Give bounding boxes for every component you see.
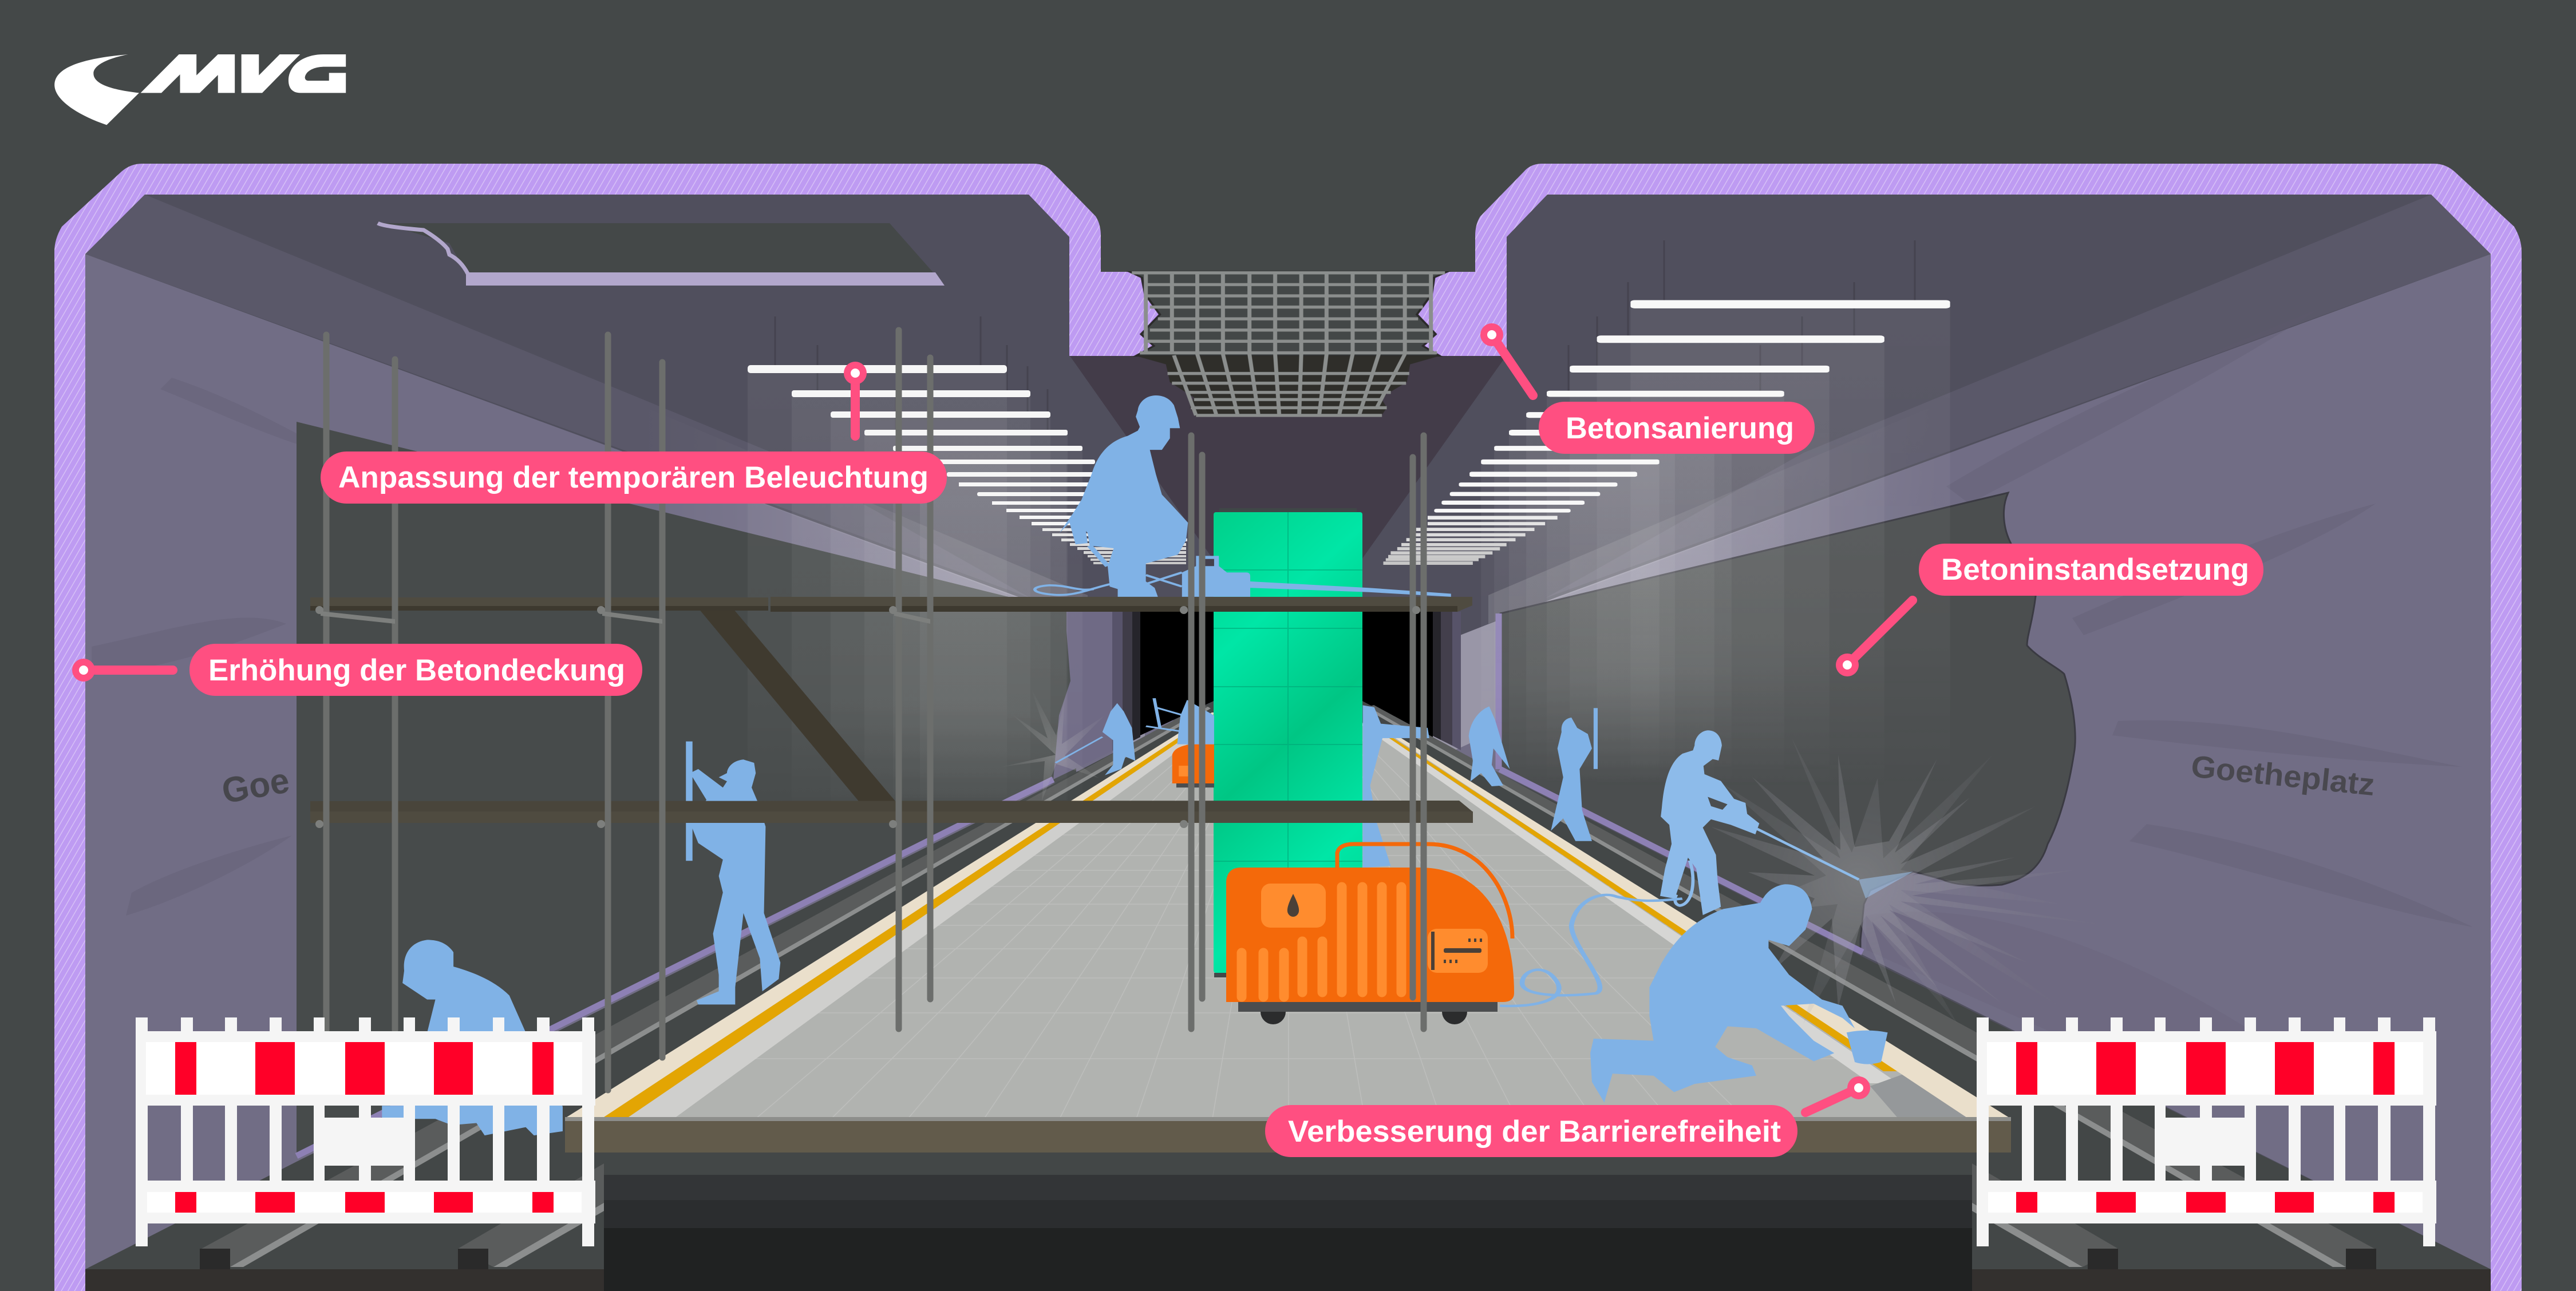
right edge tactile strip <box>1360 724 1898 1083</box>
callout: Anpassung der temporären Beleuchtung <box>321 362 947 504</box>
barrier left <box>136 1017 595 1246</box>
far tunnel end <box>1053 612 1461 779</box>
generator body <box>1226 868 1514 1002</box>
track pit <box>604 1153 1972 1291</box>
scaffold clamps <box>315 606 1420 828</box>
fuel panel <box>1261 884 1326 928</box>
rails left <box>200 705 1211 1272</box>
generator base and wheels <box>1238 1002 1498 1024</box>
light beams right <box>1481 304 1950 792</box>
worker: behind pillar right <box>1363 705 1429 868</box>
track front edge <box>85 1269 2491 1291</box>
ladder and worker behind pillar <box>1146 698 1214 744</box>
small orange generator far <box>1172 744 1214 787</box>
callout: Betonsanierung <box>1480 323 1815 454</box>
worker: right wall with straight edge <box>1551 708 1598 841</box>
ceiling side bands <box>85 195 2491 598</box>
worker: standing with pressure lance <box>1660 730 1859 915</box>
platform edge front <box>565 1117 2011 1122</box>
ceiling lights left <box>748 365 1187 564</box>
upper plank left <box>310 597 768 606</box>
right frame lower segment <box>2491 1202 2522 1291</box>
scaffold poles <box>326 330 1424 1090</box>
rails right <box>1365 705 2376 1272</box>
callout: Anpassung der temporären Beleuchtung: Anpassung der temporären Beleuchtung <box>338 461 929 494</box>
side walls <box>85 254 2491 1269</box>
platform front face <box>565 1121 2011 1153</box>
paving tile lines <box>756 740 1835 1117</box>
diagonal brace <box>690 598 895 801</box>
worker: left with straight edge <box>686 742 780 1004</box>
wall base stripes <box>297 613 1863 1156</box>
barrier right <box>1977 1017 2436 1246</box>
upper plank right <box>771 597 1472 612</box>
far workers and ladder <box>1056 698 1598 868</box>
replaced right strip <box>1870 1074 1972 1120</box>
exposed reinforcement grid <box>1130 272 1447 417</box>
logo: MVG <box>54 54 346 125</box>
generator hose <box>1500 895 1682 1006</box>
callout: Verbesserung der Barrierefreiheit <box>1265 1076 1870 1157</box>
lower plank front <box>310 811 1473 823</box>
ceiling <box>85 195 2491 1291</box>
worker: kneeling with bucket <box>1590 884 1888 1103</box>
callout: Erhöhung der Betondeckung: Erhöhung der Betondeckung <box>208 654 625 687</box>
platform <box>515 667 2061 1153</box>
wall wisps <box>92 309 2473 1087</box>
concrete repair area left <box>297 422 1076 1156</box>
right yellow strip <box>1368 724 1902 1071</box>
ceiling opening with crack <box>378 223 945 286</box>
track bed <box>85 701 2491 1291</box>
ceiling lights right <box>1383 300 1950 565</box>
right beige strip <box>1374 724 2011 1121</box>
centre dark ceiling <box>1070 356 1506 687</box>
lower plank top <box>310 801 1472 811</box>
station name right: Goetheplatz <box>2190 749 2376 802</box>
station name left: Goe <box>219 761 293 811</box>
callout: Betoninstandsetzung: Betoninstandsetzung <box>1941 553 2249 587</box>
callout: Verbesserung der Barrierefreiheit: Verbesserung der Barrierefreiheit <box>1288 1115 1781 1149</box>
cooling ribs <box>1242 887 1401 997</box>
callout: Erhöhung der Betondeckung <box>72 644 642 696</box>
concrete repair area right <box>1500 493 2075 952</box>
platform surface <box>565 712 2011 1121</box>
callout: Betonsanierung: Betonsanierung <box>1566 411 1794 445</box>
wall spray bursts <box>1002 687 2109 1024</box>
callout: Betoninstandsetzung <box>1836 544 2263 676</box>
light beams left <box>748 369 1082 829</box>
worker: far left with lance <box>1056 703 1135 775</box>
green pillar <box>1214 508 1362 977</box>
scaffolding planks and brace <box>310 597 1473 823</box>
splash point <box>1859 872 1913 898</box>
wall glow <box>85 195 2491 761</box>
worker: far right <box>1469 706 1510 786</box>
worker: crouching behind barrier <box>382 940 563 1135</box>
left edge tactile, yellow and beige strips <box>629 712 1231 1117</box>
control panel <box>1428 929 1488 973</box>
far burst <box>1002 687 1105 801</box>
tunnel interior <box>85 195 2491 1291</box>
generator handle <box>1337 844 1512 938</box>
orange generator <box>1226 844 1514 1024</box>
hanging rods <box>775 240 1915 433</box>
worker: crouching on scaffold with jackhammer <box>1035 395 1451 597</box>
